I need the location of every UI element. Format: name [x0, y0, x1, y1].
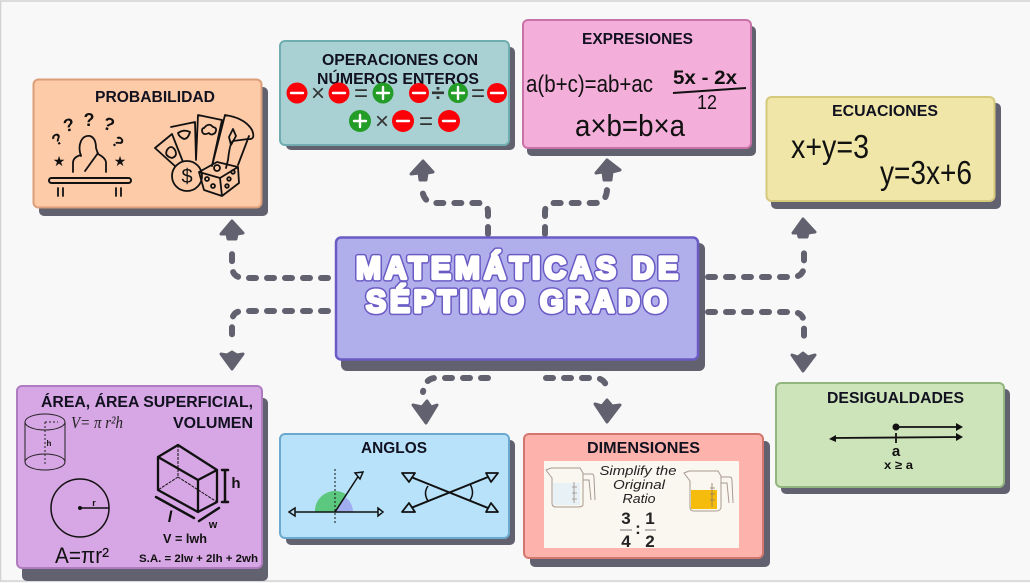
icon: vertical angles [402, 473, 498, 512]
heading: dimensiones: DIMENSIONES [587, 440, 700, 457]
icon: rectangular prism: w [208, 519, 218, 531]
heading: area, area superficial, volumen: VOLUMEN [173, 415, 253, 432]
icon: cylinder: h [47, 439, 52, 448]
icon: confused person at desk: ★ [114, 153, 126, 169]
icon: integer sign rules: × [375, 108, 389, 135]
formula: cylinder volume: V= π r²h [71, 413, 123, 432]
icon: circle [51, 479, 109, 537]
icon: cylinder [25, 414, 65, 470]
icon: integer sign rules: = [354, 80, 368, 107]
arrow: centre to ecuaciones [708, 219, 815, 277]
panel: probabilidad [34, 80, 268, 216]
chart: number line inequality: a [892, 443, 901, 460]
panel: operaciones con numeros enteros [280, 41, 515, 150]
icon: confused person at desk: ? [101, 113, 117, 136]
panel: area, area superficial, volumen [17, 386, 268, 581]
icon: integer sign rules [286, 80, 507, 135]
heading: area, area superficial, volumen: ÁREA, ÁREA SUPERFICIAL, [41, 394, 253, 411]
formula: x+y=3: x+y=3 [791, 128, 869, 165]
image: simplify the original ratio: 2 [645, 532, 655, 551]
formula: fraction: 5x - 2x [673, 68, 737, 89]
icon: cards coin and dice: $ [181, 166, 193, 188]
panel: dimensiones [524, 434, 770, 567]
arrow: centre to area [221, 311, 328, 369]
formula: prism volume: V = lwh [163, 531, 207, 546]
icon: integer sign rules: = [471, 80, 485, 107]
image: simplify the original ratio: Ratio [622, 492, 656, 506]
panel: anglos [280, 434, 515, 545]
icon: rectangular prism: l [168, 509, 173, 526]
panel: matematicas de septimo grado [336, 238, 705, 371]
formula: commutative property: a×b=b×a [575, 108, 686, 143]
heading: expresiones: EXPRESIONES [582, 31, 693, 48]
formula: circle area: A=πr² [55, 543, 109, 568]
icon: rectangular prism [156, 445, 241, 531]
icon: confused person at desk [49, 110, 131, 196]
arrow: centre to desigualdades [708, 312, 815, 371]
heading: ecuaciones: ECUACIONES [832, 103, 938, 120]
image: simplify the original ratio: Simplify the [600, 464, 677, 478]
icon: confused person at desk: ? [61, 114, 76, 136]
image: simplify the original ratio: 3 [621, 509, 631, 528]
icon: integer sign rules: ÷ [431, 80, 445, 107]
icon: adjacent angles [289, 469, 383, 523]
icon: confused person at desk: ★ [53, 153, 65, 169]
title: SÉPTIMO GRADO [366, 283, 667, 319]
icon: confused person at desk: ? [49, 130, 66, 150]
icon: circle: r [92, 498, 96, 508]
heading: anglos: ANGLOS [361, 440, 427, 457]
heading: probabilidad: PROBABILIDAD [95, 89, 215, 106]
panel: desigualdades [776, 383, 1010, 494]
heading: operaciones con numeros enteros: OPERACIONES CON [322, 52, 478, 69]
panel: ecuaciones [766, 97, 1001, 209]
arrow: centre to expresiones [545, 160, 620, 234]
icon: confused person at desk: ? [84, 110, 94, 130]
formula: y=3x+6: y=3x+6 [880, 154, 972, 191]
icon: cards coin and dice [155, 115, 253, 196]
arrow: centre to dimensiones [546, 378, 620, 422]
icon: integer sign rules: = [419, 108, 433, 135]
title: MATEMÁTICAS DE [356, 250, 678, 286]
formula: distributive property: a(b+c)=ab+ac [526, 71, 653, 98]
chart: number line inequality [829, 423, 963, 472]
title: SÉPTIMO GRADO [366, 283, 667, 319]
icon: rectangular prism: h [231, 475, 241, 492]
image: simplify the original ratio: 1 [645, 509, 655, 528]
image: simplify the original ratio: : [635, 519, 641, 538]
icon: integer sign rules: × [311, 80, 325, 107]
arrow: centre to anglos [413, 378, 488, 423]
formula: prism surface area: S.A. = 2lw + 2lh + 2wh [139, 553, 258, 565]
image: simplify the original ratio: 4 [621, 532, 631, 551]
image: simplify the original ratio: Original [613, 478, 666, 492]
title [356, 250, 678, 319]
formula: fraction: 12 [697, 92, 717, 114]
formula: fraction [673, 68, 746, 114]
icon: confused person at desk: ? [108, 133, 127, 152]
chart: number line inequality: x ≥ a [884, 458, 913, 472]
arrow: centre to operaciones [411, 161, 488, 234]
panel: expresiones [523, 20, 756, 156]
title: MATEMÁTICAS DE [356, 250, 678, 286]
image: simplify the original ratio [544, 461, 739, 551]
heading: desigualdades: DESIGUALDADES [827, 390, 964, 407]
heading: operaciones con numeros enteros: NÚMEROS ENTEROS [317, 70, 479, 88]
arrow: centre to probabilidad [221, 221, 328, 278]
